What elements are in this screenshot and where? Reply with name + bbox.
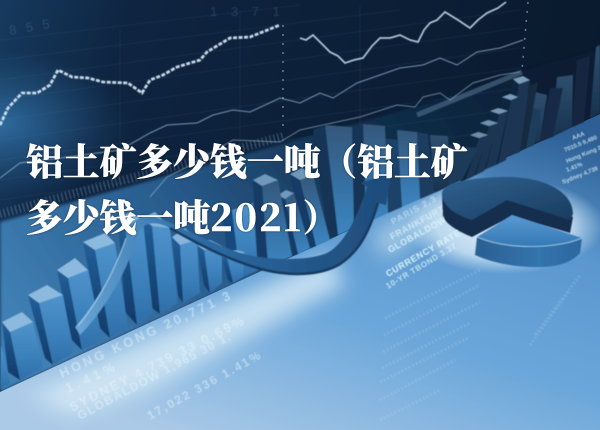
rising arrow	[75, 172, 392, 335]
bar G	[172, 228, 200, 303]
glow around pie	[405, 178, 600, 274]
pie chart	[442, 177, 582, 267]
title	[26, 133, 468, 242]
stair bar 3	[470, 120, 498, 177]
currency ticker text: CURRENCY RATE	[384, 228, 463, 279]
bar C	[57, 258, 102, 350]
pie main side	[442, 193, 573, 237]
AAA ticker top right	[562, 131, 600, 186]
stair bar 4	[460, 132, 488, 183]
bright price line left	[0, 25, 280, 125]
Hong Kong row: HONG KONG 20,771 3	[57, 287, 235, 381]
pale diagonal band right	[417, 72, 522, 115]
chart grid lines	[0, 5, 520, 200]
slice side	[475, 237, 582, 267]
AAA ticker top right: 7010.5 9,490	[564, 135, 599, 154]
percent row: 1.41%	[63, 358, 121, 396]
stair bar 1	[492, 94, 518, 166]
dotted vertical axis	[282, 25, 284, 130]
AAA ticker top right: 1.41%	[566, 162, 584, 174]
dark bars right	[460, 45, 600, 183]
thin line chart two	[150, 72, 520, 197]
pie main top	[442, 177, 573, 220]
faint data rows	[380, 270, 580, 420]
market ticker text	[57, 287, 265, 423]
slice rim highlight	[477, 237, 582, 247]
lower row: 17,022 336 1.41%	[145, 348, 265, 423]
arrow lower edge	[170, 203, 378, 274]
dotted vertical axis right	[522, 2, 528, 70]
mid bars behind title	[222, 124, 478, 282]
bar E	[118, 212, 153, 325]
blue haze left	[0, 50, 130, 200]
light lower surface	[0, 114, 600, 430]
title line 2: 多少钱一吨2021）	[26, 189, 339, 242]
surface glow below the bars	[30, 255, 345, 415]
AAA ticker top right: AAA	[572, 131, 586, 142]
currency ticker text: GLOBALDOW	[386, 214, 448, 255]
currency ticker text: 10-YR TBOND 3.37	[384, 241, 458, 291]
bar edge far left	[1, 345, 10, 388]
bar I	[222, 250, 245, 283]
tall bar	[500, 76, 530, 160]
glow strip near upper bars	[370, 175, 480, 260]
bright price line right	[300, 2, 506, 63]
hatched volume band	[0, 136, 285, 214]
faint numbers top: 1 3 7 1	[210, 4, 285, 19]
faint numbers top	[8, 4, 285, 38]
bar D	[83, 233, 128, 338]
Sydney row: SYDNEY 4,739 33 0.69%	[67, 312, 248, 415]
bar A	[2, 312, 43, 380]
mid blue band	[0, 50, 600, 392]
arrow tail highlight	[78, 238, 126, 326]
slice top	[477, 215, 582, 247]
stair bar 2	[480, 108, 508, 172]
AAA ticker top right: Sydney 4,739	[562, 166, 600, 186]
currency ticker text: PARIS 2,3	[389, 193, 438, 227]
bar F	[142, 212, 178, 314]
thin line chart one	[0, 40, 523, 178]
currency ticker text	[384, 193, 463, 291]
GlobalDow row: GLOBALDOW 1,965 30 1.	[75, 329, 234, 423]
bar B	[28, 285, 73, 365]
currency ticker text: FRANKFURT	[388, 203, 446, 242]
faint numbers top: 8 5 5	[8, 16, 54, 38]
bar H	[197, 240, 222, 293]
title line 1: 铝土矿多少钱一吨（铝土矿	[26, 133, 468, 186]
arrow body and head	[75, 172, 392, 335]
